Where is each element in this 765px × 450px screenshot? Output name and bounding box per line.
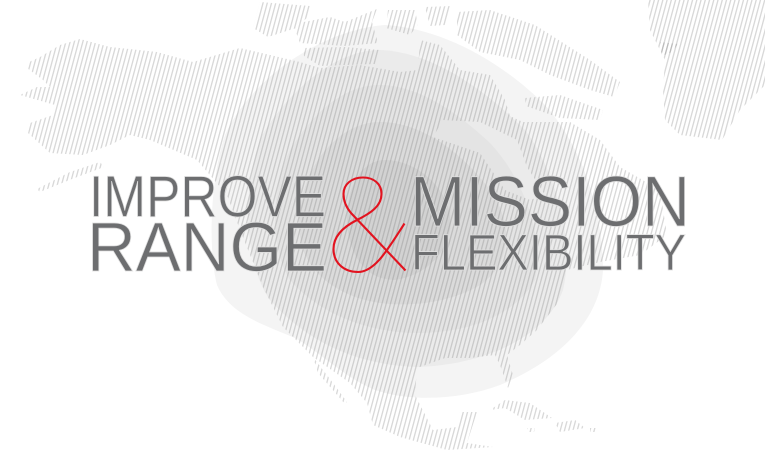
map: Arctic islands (253, 2, 620, 120)
map: Aleutian chain (37, 162, 104, 192)
heading line: RANGE: RANGE (87, 208, 327, 286)
heading line: MISSION: MISSION (410, 163, 690, 242)
map: mainland with Hudson Bay cut out (20, 39, 667, 450)
map: Baja California (313, 357, 347, 404)
red ampersand (334, 178, 406, 272)
heading: Mission Flexibility (410, 163, 690, 281)
map: Greenland islet (660, 42, 678, 56)
heading: Improve Range (87, 164, 327, 286)
heading line: FLEXIBILITY: FLEXIBILITY (411, 224, 686, 281)
range rings: concentric grey zones (212, 25, 603, 398)
map: Caribbean islands (490, 400, 596, 432)
map: Greenland (648, 0, 765, 140)
heading line: IMPROVE: IMPROVE (89, 164, 326, 230)
